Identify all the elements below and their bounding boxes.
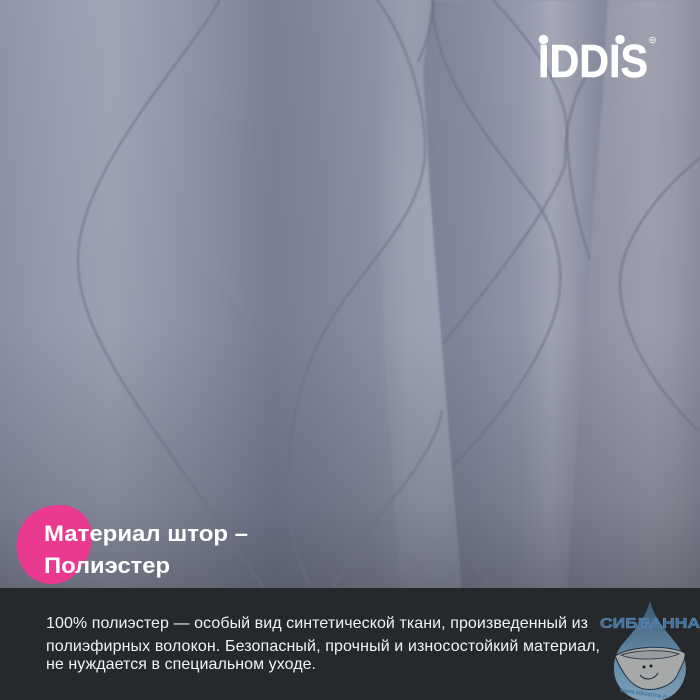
logo: IDDIS: IDDIS [538, 35, 648, 87]
brand name: СИБВАННА [600, 615, 700, 632]
watermark: Sibvanna logo [600, 600, 700, 700]
title [44, 521, 248, 578]
description text [46, 615, 600, 673]
icon: water drop [614, 600, 686, 700]
icon: smiling bathtub [615, 647, 685, 689]
panel: description [0, 588, 700, 700]
title: Материал штор – [44, 521, 248, 546]
description text: полиэфирных волокон. Безопасный, прочный и износостойкий материал, [46, 638, 600, 655]
pink blob behind title [16, 505, 92, 584]
description text: не нуждается в специальном уходе. [46, 656, 316, 673]
description text: 100% полиэстер — особый вид синтетической ткани, произведенный из [46, 615, 588, 632]
title: Полиэстер [44, 553, 170, 578]
